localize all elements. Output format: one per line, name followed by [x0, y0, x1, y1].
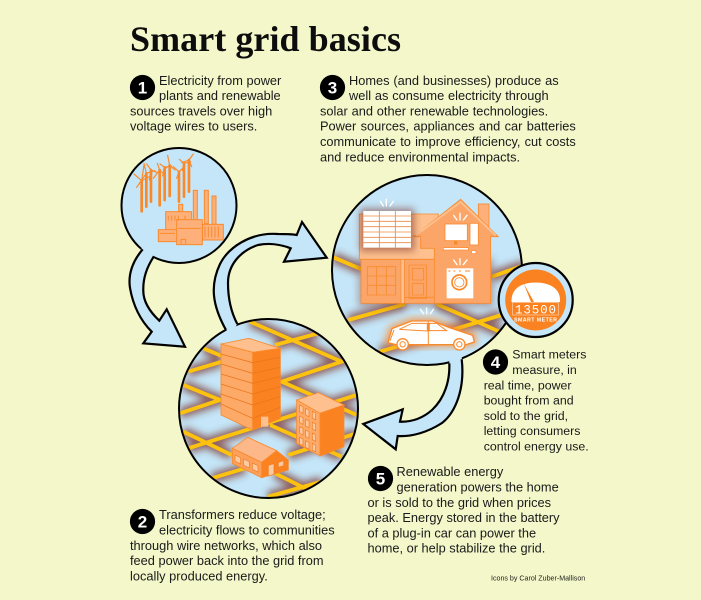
step 3 text: [320, 73, 576, 164]
badge 4: 4: [491, 353, 501, 372]
step 4 description: sold to the grid,: [484, 409, 568, 423]
badge 2: 2: [138, 512, 147, 532]
icon: computer: [443, 223, 478, 254]
sparks: [380, 199, 467, 314]
infographic canvas: [120, 26, 588, 583]
step 3 description: Power sources, appliances and car batteries: [320, 119, 576, 134]
step 3 description: and reduce environmental impacts.: [320, 149, 520, 164]
step 1 description: plants and renewable: [159, 88, 281, 103]
circle: community wire network: [179, 319, 358, 498]
badge 3: [320, 75, 345, 100]
icon: washing machine: [447, 268, 473, 298]
icon: power plant: [158, 190, 223, 245]
step 2 description: through wire networks, which also: [130, 538, 322, 553]
step 1 text: [130, 73, 282, 134]
badge 5: 5: [376, 470, 385, 488]
step 3 description: Homes (and businesses) produce as: [349, 73, 559, 88]
step 3 description: solar and other renewable technologies.: [320, 103, 548, 118]
icon: office tower: [221, 338, 280, 430]
badge 3: 3: [328, 78, 337, 98]
meter reading: 13500: [515, 304, 556, 318]
title: Smart grid basics: [130, 19, 401, 59]
step 5 description: generation powers the home: [396, 480, 559, 494]
arrow: community to home: [214, 222, 327, 332]
badge 5: [368, 466, 393, 491]
icon: rooftop solar panel: [360, 208, 414, 251]
wire network: [333, 257, 525, 352]
step 5 text: [368, 464, 560, 556]
badge 1: [130, 75, 155, 100]
step 4 description: measure, in: [512, 363, 577, 377]
step 2 text: [130, 507, 335, 583]
step 4 description: real time, power: [484, 378, 572, 392]
icon: house with appliances: [358, 199, 498, 314]
step 2 description: locally produced energy.: [130, 568, 268, 583]
badge 1: 1: [138, 78, 147, 98]
step 5 description: or is sold to the grid when prices: [368, 495, 551, 510]
step 4 description: letting consumers: [484, 424, 580, 438]
step 4 text: [483, 348, 589, 454]
meter needle: [524, 283, 534, 302]
badge 2: [130, 509, 155, 534]
step 5 description: peak. Energy stored in the battery: [368, 510, 560, 525]
wire network: [180, 322, 357, 497]
arrow: plants to community: [130, 247, 185, 347]
step 3 description: communicate to improve efficiency, cut costs: [320, 134, 576, 149]
step 4 description: control energy use.: [484, 440, 589, 454]
step 4 description: bought from and: [484, 394, 574, 408]
step 2 description: electricity flows to communities: [159, 522, 335, 538]
step 5 description: Renewable energy: [396, 464, 504, 479]
step 5 description: of a plug-in car can power the: [368, 525, 536, 540]
smart meter gauge: [499, 263, 573, 337]
circle: power plants and wind turbines: [122, 148, 236, 263]
icon: house: [232, 437, 288, 478]
credit: Icons by Carol Zuber-Mallison: [491, 574, 585, 582]
icon: electric car: [387, 321, 474, 350]
step 2 description: feed power back into the grid from: [130, 553, 323, 568]
arrow: home to community: [363, 357, 462, 449]
meter label: SMART METER: [514, 318, 557, 324]
step 1 description: voltage wires to users.: [130, 119, 257, 134]
meter dial: [511, 282, 560, 302]
step 2 description: Transformers reduce voltage;: [159, 507, 326, 522]
step 5 description: home, or help stabilize the grid.: [368, 541, 545, 556]
step 1 description: sources travels over high: [130, 103, 272, 118]
circle: home producing and consuming electricity: [332, 175, 525, 365]
icon: apartment building: [297, 393, 344, 456]
step 1 description: Electricity from power: [159, 73, 282, 88]
step 3 description: well as consume electricity through: [348, 88, 549, 103]
icon: wind turbines: [134, 154, 193, 211]
step 4 description: Smart meters: [512, 348, 586, 362]
